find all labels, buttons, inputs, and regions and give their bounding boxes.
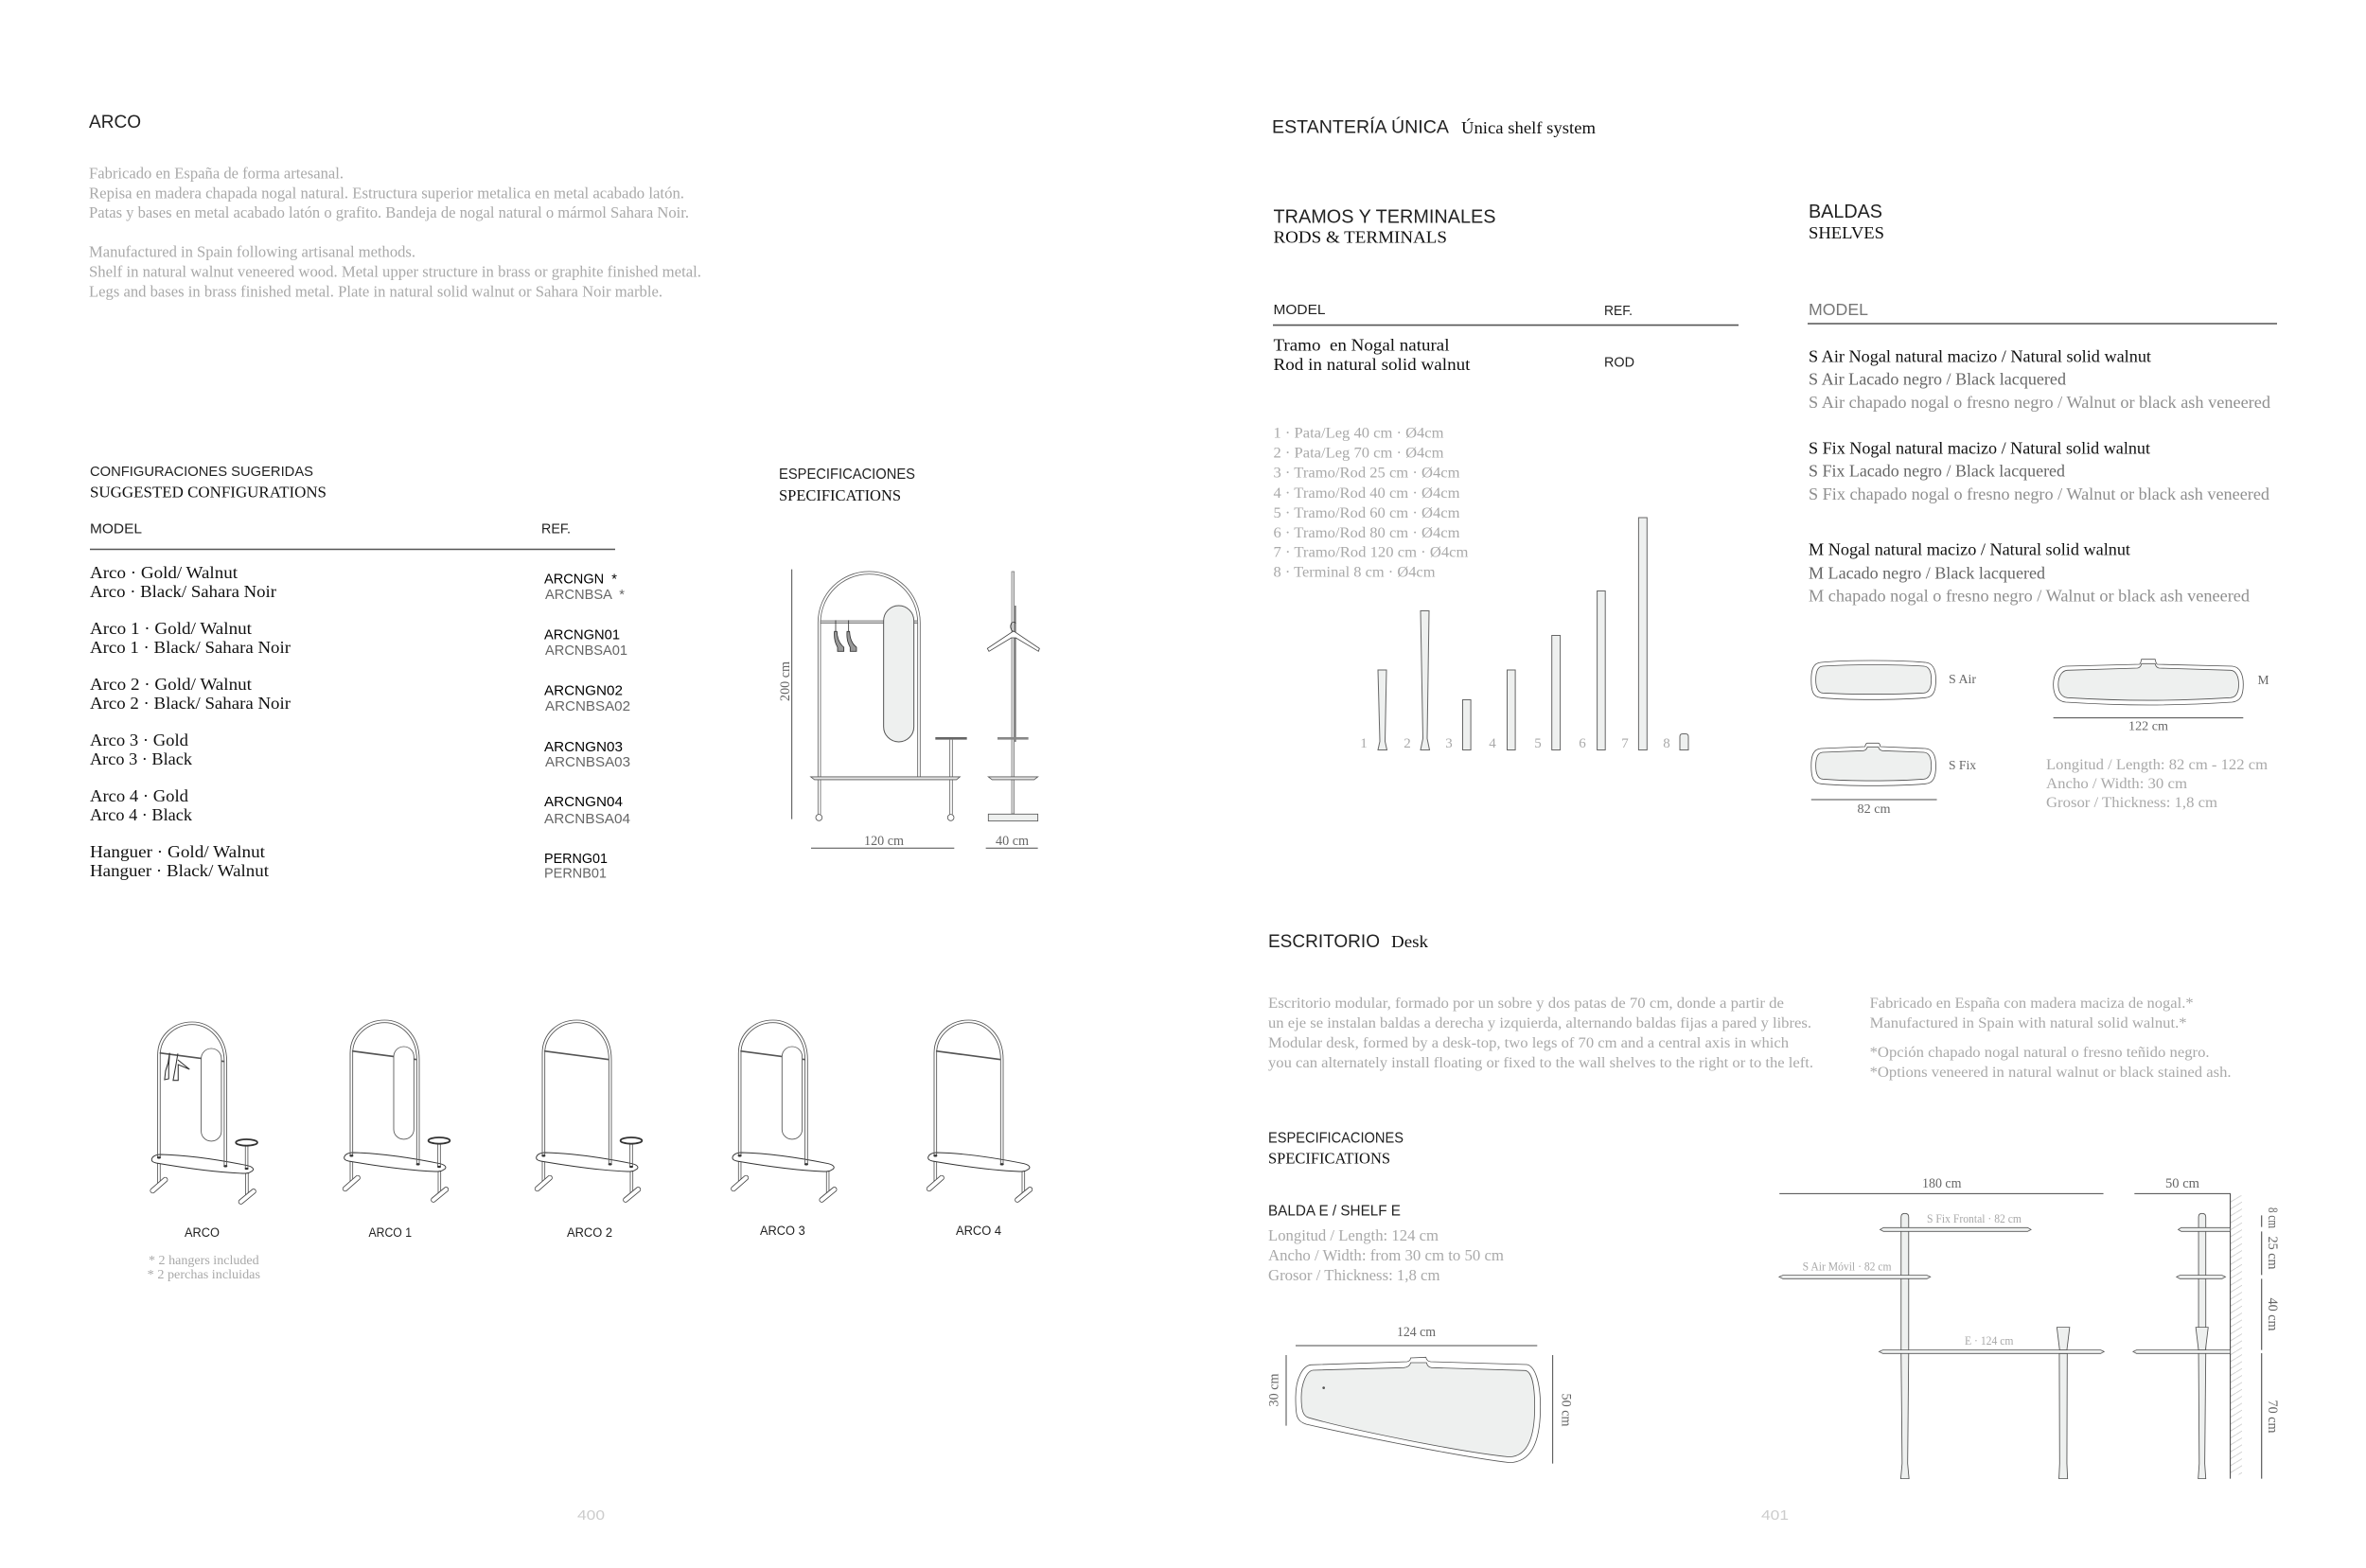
heading: escritorio: ESCRITORIO — [1268, 932, 1380, 952]
column headers: REF. — [541, 520, 571, 537]
heading: ARCO: ARCO — [89, 112, 141, 132]
parts list: 2 · Pata/Leg 70 cm · Ø4cm — [1274, 445, 1444, 462]
text block: Arco description: Shelf in natural walnut veneered wood. Metal upper structure in brass or graphite finished metal. — [89, 263, 701, 280]
reference codes: ARCNBSA02 — [545, 698, 630, 714]
heading: specifications: SPECIFICATIONS — [779, 486, 901, 504]
shelf labels: 122 cm — [2128, 719, 2168, 734]
rod lengths chart — [1378, 518, 1688, 749]
illustration: ARCO 3 — [733, 1020, 835, 1200]
shelf E outline with dimensions — [1286, 1346, 1553, 1464]
shelf model list — [1809, 346, 2270, 606]
model names: Arco 4 · Black — [90, 805, 192, 824]
rod number labels: 2 — [1404, 736, 1411, 751]
side elevation drawing — [986, 572, 1039, 848]
rod number labels — [1360, 736, 1670, 751]
heading: baldas: BALDAS — [1809, 202, 1882, 222]
heading: Estantería Única: ESTANTERÍA ÚNICA — [1272, 115, 1449, 138]
text block: desk materials: *Opción chapado nogal natural o fresno teñido negro. — [1870, 1045, 2210, 1061]
panel: Arco specifications — [778, 467, 1039, 849]
rod number labels: 5 — [1534, 736, 1542, 751]
rod number labels: 1 — [1360, 736, 1368, 751]
illustration: ARCO 4 — [928, 1020, 1030, 1200]
shelf labels: S Air — [1949, 673, 1976, 687]
reference codes: ARCNGN03 — [544, 739, 623, 755]
model names: Arco · Black/ Sahara Noir — [90, 582, 276, 601]
heading: especificaciones: ESPECIFICACIONES — [1268, 1130, 1404, 1147]
reference codes: ARCNGN04 — [544, 794, 623, 810]
model names: Arco · Gold/ Walnut — [90, 563, 238, 582]
panel: rods and terminals — [1273, 206, 1739, 751]
panel: Estantería Única title — [1272, 115, 1596, 138]
shelf model list: S Fix chapado nogal o fresno negro / Walnut or black ash veneered — [1809, 484, 2269, 503]
text block: desk description: Escritorio modular, formado por un sobre y dos patas de 70 cm, donde a partir de — [1268, 995, 1784, 1012]
reference codes: PERNB01 — [544, 865, 607, 882]
model names: Hanguer · Gold/ Walnut — [90, 842, 265, 861]
illustration: ARCO — [151, 1022, 257, 1202]
shelf model list: S Air Nogal natural macizo / Natural solid walnut — [1809, 346, 2151, 365]
shelf E specifications — [1268, 1226, 1504, 1284]
text block: desk description: un eje se instalan baldas a derecha y izquierda, alternando baldas fijas a pared y libres. — [1268, 1015, 1811, 1031]
model names — [90, 563, 291, 880]
label: ARCO 4: ARCO 4 — [956, 1224, 1001, 1238]
rod number labels: 6 — [1579, 736, 1586, 751]
model names: Arco 4 · Gold — [90, 786, 188, 805]
dimension: 40 cm: 40 cm — [996, 834, 1029, 849]
panel: desk elevations — [1779, 1176, 2280, 1479]
column header: model: MODEL — [1809, 300, 1868, 319]
shelf labels: 82 cm — [1857, 802, 1891, 817]
shelf model list: M chapado nogal o fresno negro / Walnut or black ash veneered — [1809, 587, 2250, 606]
text block: desk description: you can alternately install floating or fixed to the wall shelves to the right or to the left. — [1268, 1055, 1813, 1071]
page number: 400: 400 — [577, 1507, 605, 1524]
note: hangers included: * 2 hangers included — [149, 1254, 259, 1268]
label: S Fix Frontal: S Fix Frontal · 82 cm — [1927, 1211, 2022, 1225]
model description: Rod in natural solid walnut — [1274, 355, 1471, 374]
text block: Arco description: Fabricado en España de forma artesanal. — [89, 165, 344, 182]
reference codes: ARCNBSA04 — [544, 811, 630, 827]
model names: Arco 3 · Black — [90, 749, 192, 768]
dimension: 124 cm: 124 cm — [1397, 1325, 1436, 1340]
model names: Hanguer · Black/ Walnut — [90, 861, 269, 880]
dimension: 180 cm: 180 cm — [1922, 1176, 1962, 1191]
parts list: 3 · Tramo/Rod 25 cm · Ø4cm — [1274, 466, 1459, 481]
reference codes: ARCNBSA03 — [545, 754, 630, 770]
illustration: ARCO 2 — [537, 1020, 642, 1200]
text block: desk materials: *Options veneered in natural walnut or black stained ash. — [1870, 1065, 2232, 1081]
shelf labels: M — [2258, 674, 2269, 688]
text block: desk materials: Manufactured in Spain with natural solid walnut.* — [1870, 1015, 2187, 1031]
model description: Tramo en Nogal natural — [1274, 335, 1450, 354]
model names: Arco 1 · Gold/ Walnut — [90, 619, 252, 638]
dimension: 30 cm: 30 cm — [1267, 1373, 1282, 1406]
text block: Arco description: Manufactured in Spain following artisanal methods. — [89, 242, 415, 261]
column headers — [1274, 302, 1633, 319]
label: ARCO: ARCO — [185, 1225, 220, 1240]
column headers: REF. — [1604, 303, 1633, 319]
shelf E specifications: Longitud / Length: 124 cm — [1268, 1226, 1439, 1244]
panel: desk description — [1268, 932, 2232, 1081]
heading: suggested configurations: SUGGESTED CONFIGURATIONS — [90, 483, 327, 502]
model names: Arco 2 · Gold/ Walnut — [90, 675, 252, 694]
parts list: 1 · Pata/Leg 40 cm · Ø4cm — [1274, 426, 1444, 441]
panel: Arco configurations gallery — [148, 1020, 1030, 1282]
text block: desk description: Modular desk, formed by a desk-top, two legs of 70 cm and a central axis in which — [1268, 1035, 1789, 1051]
dimension: 70 cm: 70 cm — [2265, 1401, 2280, 1434]
parts list: 7 · Tramo/Rod 120 cm · Ø4cm — [1274, 545, 1469, 560]
shelf specifications: Ancho / Width: 30 cm — [2046, 776, 2188, 792]
dimension: 8 cm: 8 cm — [2265, 1207, 2280, 1228]
parts list: 4 · Tramo/Rod 40 cm · Ø4cm — [1274, 485, 1459, 502]
text block: Arco description: Repisa en madera chapada nogal natural. Estructura superior metalica en metal acabado latón. — [89, 184, 684, 203]
heading: configuraciones sugeridas: CONFIGURACIONES SUGERIDAS — [90, 464, 313, 480]
model names: Arco 3 · Gold — [90, 731, 188, 749]
reference codes: ARCNBSA01 — [545, 643, 627, 659]
shelf E specifications: Ancho / Width: from 30 cm to 50 cm — [1268, 1246, 1504, 1264]
dimension: 120 cm: 120 cm — [864, 834, 904, 849]
shelf model list: S Fix Nogal natural macizo / Natural solid walnut — [1809, 439, 2150, 458]
shelf labels: S Fix — [1949, 759, 1976, 773]
heading: shelves: SHELVES — [1809, 223, 1884, 242]
note: hangers included — [148, 1254, 260, 1282]
reference codes: ARCNGN01 — [544, 626, 620, 643]
panel: desk specifications — [1267, 1130, 1574, 1464]
rod number labels: 8 — [1663, 736, 1670, 751]
heading: Única shelf system: Única shelf system — [1461, 117, 1596, 137]
shelf specifications — [2046, 757, 2269, 811]
text block: desk description — [1268, 995, 1813, 1071]
heading: tramos y terminales: TRAMOS Y TERMINALES — [1274, 206, 1495, 227]
reference codes — [544, 572, 630, 882]
dimension: 50 cm: 50 cm — [1559, 1393, 1574, 1427]
note: hangers included: * 2 perchas incluidas — [148, 1268, 260, 1282]
front elevation drawing — [1779, 1193, 2104, 1479]
text block: Arco description: Patas y bases en metal acabado latón o grafito. Bandeja de nogal natural o mármol Sahara Noir. — [89, 203, 689, 221]
dimension: 200 cm: 200 cm — [778, 661, 793, 701]
shelf model list: S Air chapado nogal o fresno negro / Walnut or black ash veneered — [1809, 393, 2270, 412]
reference: ROD: ROD — [1604, 354, 1634, 371]
column headers — [90, 520, 571, 537]
dimension: 40 cm: 40 cm — [2265, 1298, 2280, 1331]
shelf model list: M Lacado negro / Black lacquered — [1809, 564, 2045, 583]
label: ARCO 2: ARCO 2 — [567, 1225, 612, 1240]
rod number labels: 7 — [1621, 736, 1629, 751]
model description — [1274, 335, 1471, 374]
text block: Arco description — [89, 165, 701, 301]
model names: Arco 2 · Black/ Sahara Noir — [90, 694, 291, 713]
parts list: 8 · Terminal 8 cm · Ø4cm — [1274, 564, 1435, 581]
model names: Arco 1 · Black/ Sahara Noir — [90, 638, 291, 657]
parts list: 5 · Tramo/Rod 60 cm · Ø4cm — [1274, 505, 1459, 521]
panel: Arco introduction — [89, 112, 701, 301]
reference codes: ARCNGN * — [544, 572, 617, 587]
shelf labels — [1857, 673, 2269, 817]
text block: desk materials: Fabricado en España con madera maciza de nogal.* — [1870, 995, 2194, 1012]
heading: specifications: SPECIFICATIONS — [1268, 1149, 1390, 1168]
reference codes: PERNG01 — [544, 851, 608, 867]
side elevation drawing — [2133, 1193, 2262, 1479]
page number: 401: 401 — [1761, 1507, 1789, 1524]
heading: rods and terminals: RODS & TERMINALS — [1274, 227, 1447, 246]
front elevation drawing — [792, 570, 967, 848]
illustration: ARCO 1 — [344, 1020, 450, 1200]
label: ARCO 3: ARCO 3 — [760, 1224, 805, 1238]
label: E 124 cm: E · 124 cm — [1965, 1333, 2014, 1348]
shelf specifications: Grosor / Thickness: 1,8 cm — [2046, 795, 2218, 811]
panel: suggested configurations table — [90, 464, 630, 882]
column headers: MODEL — [1274, 302, 1325, 318]
dimension: 50 cm: 50 cm — [2165, 1176, 2199, 1191]
reference codes: ARCNBSA * — [545, 587, 625, 603]
parts list: 6 · Tramo/Rod 80 cm · Ø4cm — [1274, 525, 1459, 541]
shelf E specifications: Grosor / Thickness: 1,8 cm — [1268, 1266, 1440, 1284]
shelf model list: M Nogal natural macizo / Natural solid walnut — [1809, 539, 2130, 558]
text block: Arco description: Legs and bases in brass finished metal. Plate in natural solid walnut or Sahara Noir marble. — [89, 282, 662, 301]
label: S Air Móvil: S Air Móvil · 82 cm — [1803, 1260, 1892, 1274]
shelf model list: S Fix Lacado negro / Black lacquered — [1809, 462, 2065, 481]
column headers: MODEL — [90, 520, 142, 537]
shelf outlines — [1811, 660, 2243, 800]
reference codes: ARCNGN02 — [544, 683, 623, 698]
text block: desk materials — [1870, 995, 2232, 1081]
rod number labels: 4 — [1489, 736, 1496, 751]
rod number labels: 3 — [1445, 736, 1453, 751]
dimension: 25 cm: 25 cm — [2265, 1236, 2280, 1270]
panel: shelves — [1808, 202, 2277, 817]
heading: especificaciones: ESPECIFICACIONES — [779, 467, 915, 483]
heading: desk: Desk — [1391, 932, 1428, 951]
shelf specifications: Longitud / Length: 82 cm - 122 cm — [2046, 757, 2269, 773]
heading: balda e: BALDA E / SHELF E — [1268, 1204, 1401, 1219]
label: ARCO 1: ARCO 1 — [369, 1225, 412, 1240]
shelf model list: S Air Lacado negro / Black lacquered — [1809, 369, 2066, 388]
parts list — [1274, 426, 1469, 581]
